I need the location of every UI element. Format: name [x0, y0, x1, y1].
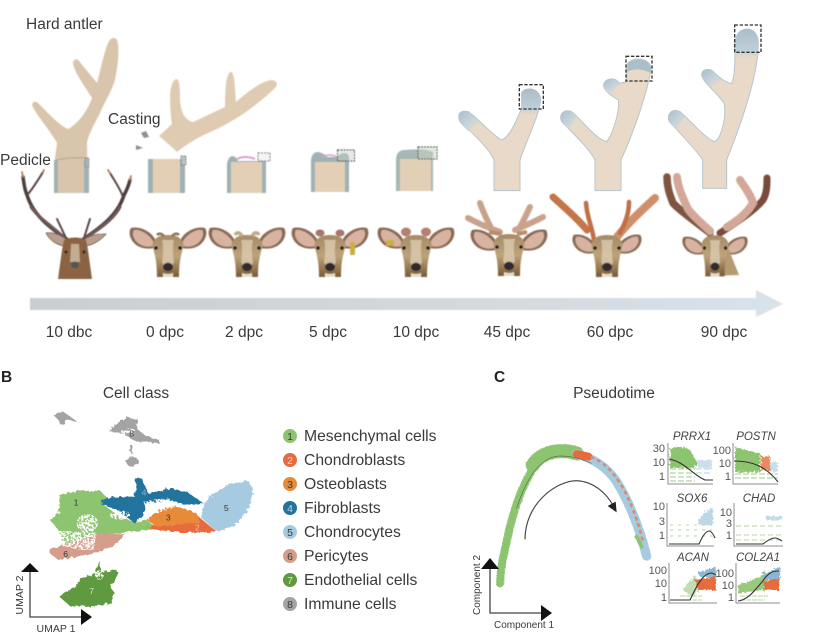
timeline labels: 0 dpc	[146, 324, 184, 341]
deer head: 90 dpc	[667, 177, 767, 276]
legend: cell classes: Immune cells	[304, 596, 397, 613]
gene plot: SOX6: 10	[653, 501, 665, 513]
trajectory scatter	[500, 451, 647, 583]
gene plot: CHAD: CHAD	[743, 493, 775, 505]
gene plot: ACAN: 10	[655, 578, 667, 590]
gene plot: POSTN: POSTN	[736, 431, 776, 443]
legend: cell classes: 7	[287, 575, 293, 587]
cluster numbers: 6	[63, 549, 68, 559]
deer head: 10 dpc	[378, 227, 454, 277]
timeline labels: 2 dpc	[225, 324, 263, 341]
illustration: antler 90 dpc	[668, 25, 761, 188]
cluster numbers: 2	[195, 522, 200, 532]
UMAP axes: UMAP 1	[37, 623, 76, 635]
pseudotime direction arrow	[525, 481, 617, 539]
gene plot: ACAN	[649, 552, 717, 604]
timeline labels: 10 dbc	[46, 324, 93, 341]
cluster numbers	[63, 429, 229, 596]
legend: cell classes: 2	[287, 455, 293, 467]
panel: antler regeneration timeline	[0, 16, 783, 341]
timeline labels: 90 dpc	[701, 324, 748, 341]
cluster numbers: 1	[74, 498, 79, 508]
legend: cell classes: 4	[287, 503, 293, 515]
panel letter B: B	[1, 369, 12, 386]
UMAP axes: UMAP 2	[14, 575, 26, 614]
gene plot: PRRX1: 30	[653, 443, 665, 455]
UMAP scatter	[50, 412, 253, 607]
gene plot: POSTN	[713, 431, 778, 484]
gene plot: PRRX1: PRRX1	[673, 431, 711, 443]
gene plot: SOX6: SOX6	[677, 493, 708, 505]
panel C: pseudotime	[472, 369, 783, 631]
gene plot: PRRX1: 1	[659, 471, 665, 483]
gene plot: COL2A1	[716, 552, 780, 604]
label: pedicle: Pedicle	[0, 152, 51, 169]
legend: cell classes: 1	[287, 431, 293, 443]
timeline labels: 45 dpc	[484, 324, 531, 341]
panel B: cell class UMAP	[1, 369, 437, 635]
UMAP axes	[14, 563, 92, 635]
legend: cell classes: Mesenchymal cells	[304, 428, 437, 445]
gene plot: ACAN: 100	[649, 565, 667, 577]
gene plot: COL2A1: 10	[722, 580, 734, 592]
heading: hard antler: Hard antler	[26, 16, 103, 33]
deer head: 2 dpc	[209, 227, 285, 277]
timeline labels: 10 dpc	[393, 324, 440, 341]
cluster numbers: 5	[224, 503, 229, 513]
cluster numbers: 3	[166, 512, 171, 522]
component axes: Component 1	[494, 620, 554, 631]
legend: cell classes: Osteoblasts	[304, 476, 387, 493]
gene plot: CHAD: 3	[726, 518, 732, 530]
legend: cell classes: Endothelial cells	[304, 572, 418, 589]
gene plot: ACAN: 1	[661, 592, 667, 604]
gene plot: SOX6	[653, 493, 715, 546]
gene plot: POSTN: 100	[713, 445, 731, 457]
illustration: pedicle 10 dpc	[396, 147, 437, 191]
deer head: 10 dbc with hard antlers	[22, 170, 131, 279]
timeline arrow	[30, 290, 783, 317]
illustration: pedicle 0 dpc	[148, 156, 186, 193]
cluster numbers: 4	[142, 488, 147, 498]
illustration: antler 45 dpc	[458, 85, 543, 191]
gene plot: COL2A1: COL2A1	[736, 552, 780, 564]
gene plot: SOX6: 3	[659, 516, 665, 528]
illustration: pedicle 2 dpc	[227, 153, 270, 193]
timeline labels	[46, 324, 748, 341]
gene plot: COL2A1: 1	[728, 592, 734, 604]
gene plot: CHAD: 1	[726, 530, 732, 542]
timeline labels: 60 dpc	[587, 324, 634, 341]
illustration: pedicle 5 dpc	[311, 150, 354, 192]
gene plot: POSTN: 10	[719, 458, 731, 470]
gene plot: PRRX1	[653, 431, 713, 484]
deer head: 60 dpc	[553, 197, 655, 277]
label: casting: Casting	[108, 111, 161, 128]
illustration: antler 60 dpc	[561, 56, 652, 191]
icon: casting fragments	[136, 131, 149, 150]
legend: cell classes: Pericytes	[304, 548, 369, 565]
panel letter C: C	[494, 369, 505, 386]
timeline labels: 5 dpc	[309, 324, 347, 341]
gene plot: ACAN: ACAN	[676, 552, 710, 564]
deer head: 5 dpc	[292, 227, 368, 277]
illustration: cast antler	[159, 72, 277, 152]
heading: cell class: Cell class	[103, 385, 169, 402]
heading: pseudotime: Pseudotime	[573, 385, 655, 402]
legend: cell classes	[283, 428, 437, 613]
legend: cell classes: Chondrocytes	[304, 524, 401, 541]
gene plot: CHAD	[720, 493, 783, 546]
legend: cell classes: 6	[287, 551, 293, 563]
illustration: hard antler with pedicle	[32, 38, 118, 193]
legend: cell classes: 5	[287, 527, 293, 539]
deer head: 0 dpc	[130, 227, 206, 277]
legend: cell classes: 8	[287, 599, 293, 611]
gene plot: CHAD: 10	[720, 507, 732, 519]
gene plot: SOX6: 1	[659, 530, 665, 542]
component axes	[472, 555, 554, 631]
legend: cell classes: Fibroblasts	[304, 500, 381, 517]
gene plot: POSTN: 1	[725, 471, 731, 483]
deer head: 45 dpc	[468, 203, 547, 276]
legend: cell classes: Chondroblasts	[304, 452, 405, 469]
component axes: Component 2	[472, 555, 483, 615]
legend: cell classes: 3	[287, 479, 293, 491]
cluster numbers: 8	[129, 429, 134, 439]
cluster numbers: 7	[89, 586, 94, 596]
gene plot: COL2A1: 100	[716, 568, 734, 580]
gene plot: PRRX1: 10	[653, 457, 665, 469]
